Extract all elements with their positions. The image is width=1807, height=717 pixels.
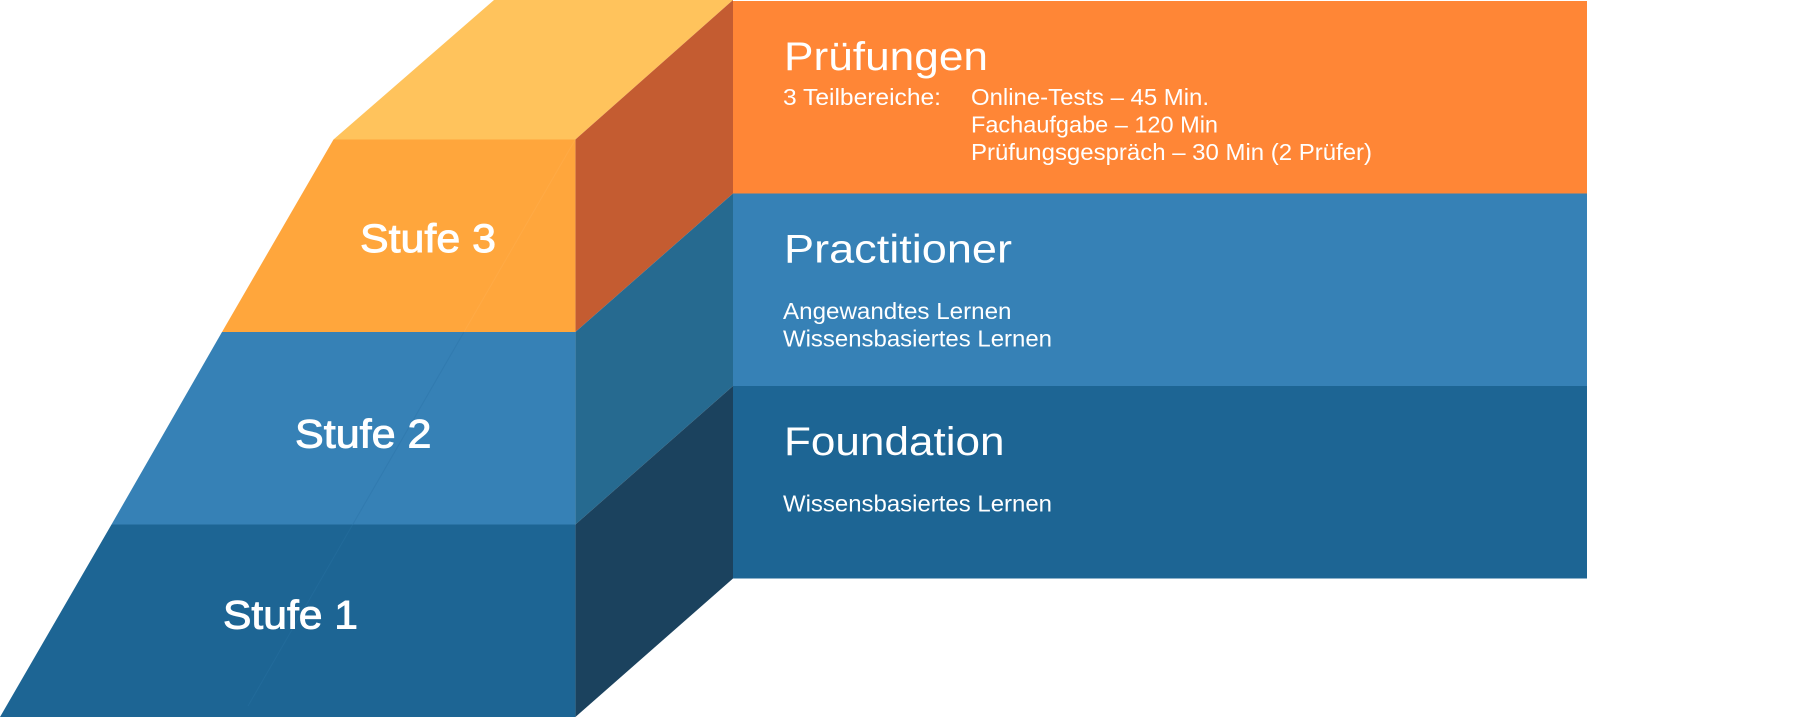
side face: level 2: [575, 194, 733, 524]
panel: Foundation: [733, 386, 1587, 578]
panel: Practitioner: [733, 194, 1587, 386]
step: Stufe 1: [0, 524, 575, 717]
text: Wissensbasiertes Lernen: Wissensbasiertes Lernen: [783, 491, 1052, 517]
side face: level 1: [575, 386, 733, 717]
text: Wissensbasiertes Lernen: Wissensbasiertes Lernen: [783, 326, 1052, 352]
step: Stufe 3: [222, 140, 575, 332]
top face of the block: [334, 0, 733, 140]
label: Stufe 2: Stufe 2: [295, 413, 432, 457]
heading: Prüfungen: Prüfungen: [784, 35, 988, 79]
label: Stufe 1: Stufe 1: [223, 594, 358, 638]
heading: Practitioner: Practitioner: [784, 228, 1012, 272]
text: Online-Tests: Online-Tests – 45 Min.: [971, 84, 1209, 110]
panel: Prüfungen: [733, 1, 1587, 194]
text: Prüfungsgespräch: Prüfungsgespräch – 30 Min (2 Prüfer): [971, 139, 1372, 165]
step: Stufe 2: [112, 332, 575, 524]
heading: Foundation: Foundation: [784, 420, 1004, 464]
text: 3 Teilbereiche: 3 Teilbereiche:: [783, 84, 941, 110]
label: Stufe 3: Stufe 3: [360, 217, 496, 261]
side face: level 3: [575, 0, 733, 332]
text: Angewandtes Lernen: Angewandtes Lernen: [783, 298, 1012, 324]
text: Fachaufgabe: Fachaufgabe – 120 Min: [971, 112, 1218, 138]
